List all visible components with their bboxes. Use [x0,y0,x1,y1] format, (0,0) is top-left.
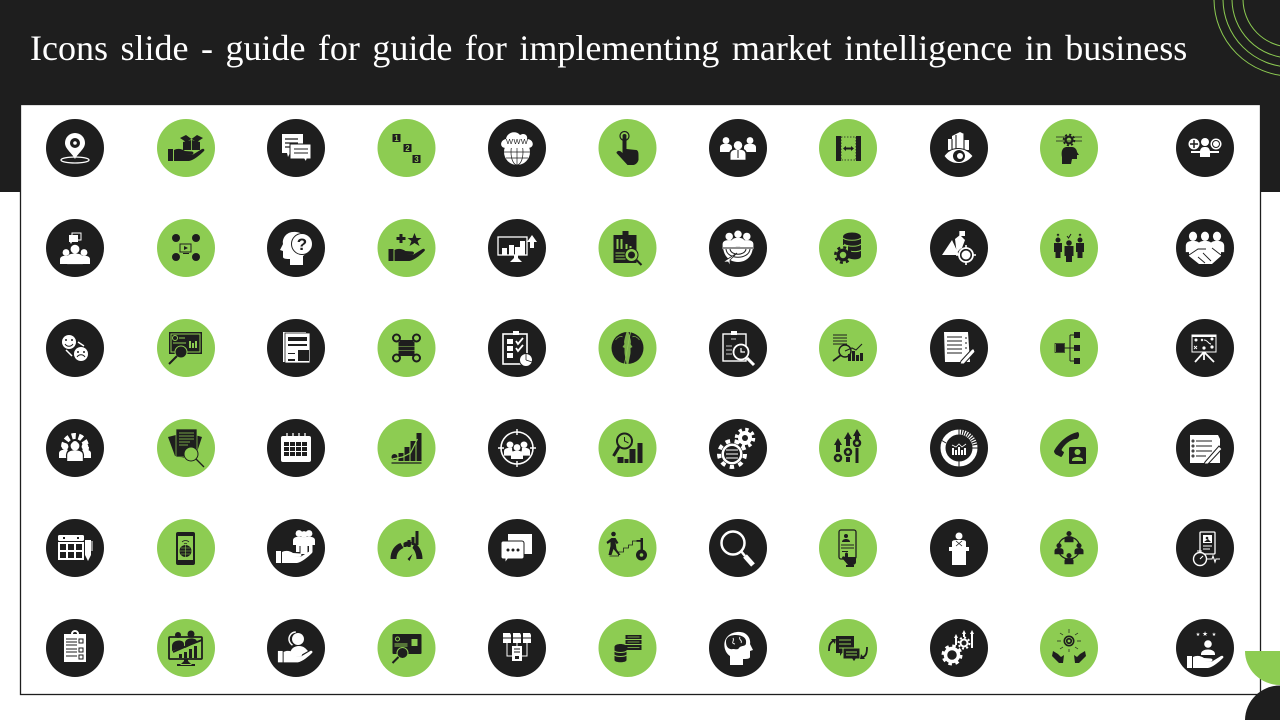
icon: gears with arrows [930,619,988,677]
icon: audience with chat [46,219,104,277]
title: Icons slide - guide for guide for implementing market intelligence in business [30,28,1187,68]
icon: notes with pen [1176,419,1234,477]
icon: phone profile touch [819,519,877,577]
icon: monitor people growth [157,619,215,677]
icon: document with pen [930,319,988,377]
icon: magnifying glass [709,519,767,577]
icon: stairs to key [598,519,656,577]
icon: chat documents [267,119,325,177]
icon: numbered steps: 3 [414,155,419,164]
icon: database and stacks [598,619,656,677]
icon: calendar [267,419,325,477]
header band [0,0,1280,192]
icon: checklist with pie [488,319,546,377]
icon: width bars with arrow [819,119,877,177]
icon: eye with buildings [930,119,988,177]
icon: documents with magnifier [157,419,215,477]
icon: numbered steps [378,119,436,177]
icon: hand with rated person: ★ [1202,630,1208,638]
icon: head with question [267,219,325,277]
icon: www cloud globe [488,119,546,177]
icon: numbered steps: 1 [394,134,399,143]
icon: hand with rated person: ★ [1196,632,1201,638]
white content panel [20,104,1260,694]
icon: presentation magnifier [157,319,215,377]
icon: team circle [1040,519,1098,577]
icon: profile with stopwatch [1176,519,1234,577]
icon: hand holding box [157,119,215,177]
icon: phone with globe [157,519,215,577]
icon: calendar with pen [46,519,104,577]
icon: hand holding people [267,519,325,577]
icon: www cloud globe: WWW [506,137,529,146]
icon: head with brain [709,619,767,677]
icon: connected file servers [488,619,546,677]
icon: hierarchy tree [1040,319,1098,377]
icon: growth bar chart [378,419,436,477]
icon: location pin [46,119,104,177]
icon: clipboard with pie magnifier [709,319,767,377]
icon: target with team [488,419,546,477]
icon: two heads in circle [598,319,656,377]
icon: phone contact [1040,419,1098,477]
icon: settings gears [709,419,767,477]
icon: clipboard analysis [598,219,656,277]
icon: team in gear [46,419,104,477]
icon: video with speech bubbles [157,219,215,277]
icon: network server [378,319,436,377]
icon: gauge with bars [378,519,436,577]
icon: presentation with magnifier [378,619,436,677]
decorative dark quarter circle [1245,686,1280,720]
icon: gear above head [1040,119,1098,177]
decorative green half circle [1245,651,1280,685]
icon: numbered steps: 2 [405,144,410,153]
icon: hand holding support agent [267,619,325,677]
icon: chat cycle [819,619,877,677]
icon: happy and sad faces [46,319,104,377]
icon: magnifier on bar chart [598,419,656,477]
icon: hands with target [1040,619,1098,677]
icon: hand with rated person: ★ [1212,632,1217,638]
icon: newspaper document [267,319,325,377]
icon: clipboard checklist [46,619,104,677]
icon: hand with rated person [1176,619,1234,677]
icon: monitor with growth bars [488,219,546,277]
icon: group handshake [1176,219,1234,277]
icon: target people [709,219,767,277]
icon: strategy board [1176,319,1234,377]
icon: arrows with gears [819,419,877,477]
icon: three business people [709,119,767,177]
icon: three men selection [1040,219,1098,277]
icon: hand with plus and star [378,219,436,277]
icon: mountain flag with target [930,219,988,277]
icon: donut dashboard [930,419,988,477]
icon: database with gear [819,219,877,277]
icon: person weighing options [1176,119,1234,177]
icon: speaker at podium [930,519,988,577]
icon: analysis growth chart [819,319,877,377]
decorative concentric arcs [1214,0,1280,76]
icon: chat bubbles [488,519,546,577]
icon: head with question: ? [297,235,307,254]
icon: finger touch [598,119,656,177]
